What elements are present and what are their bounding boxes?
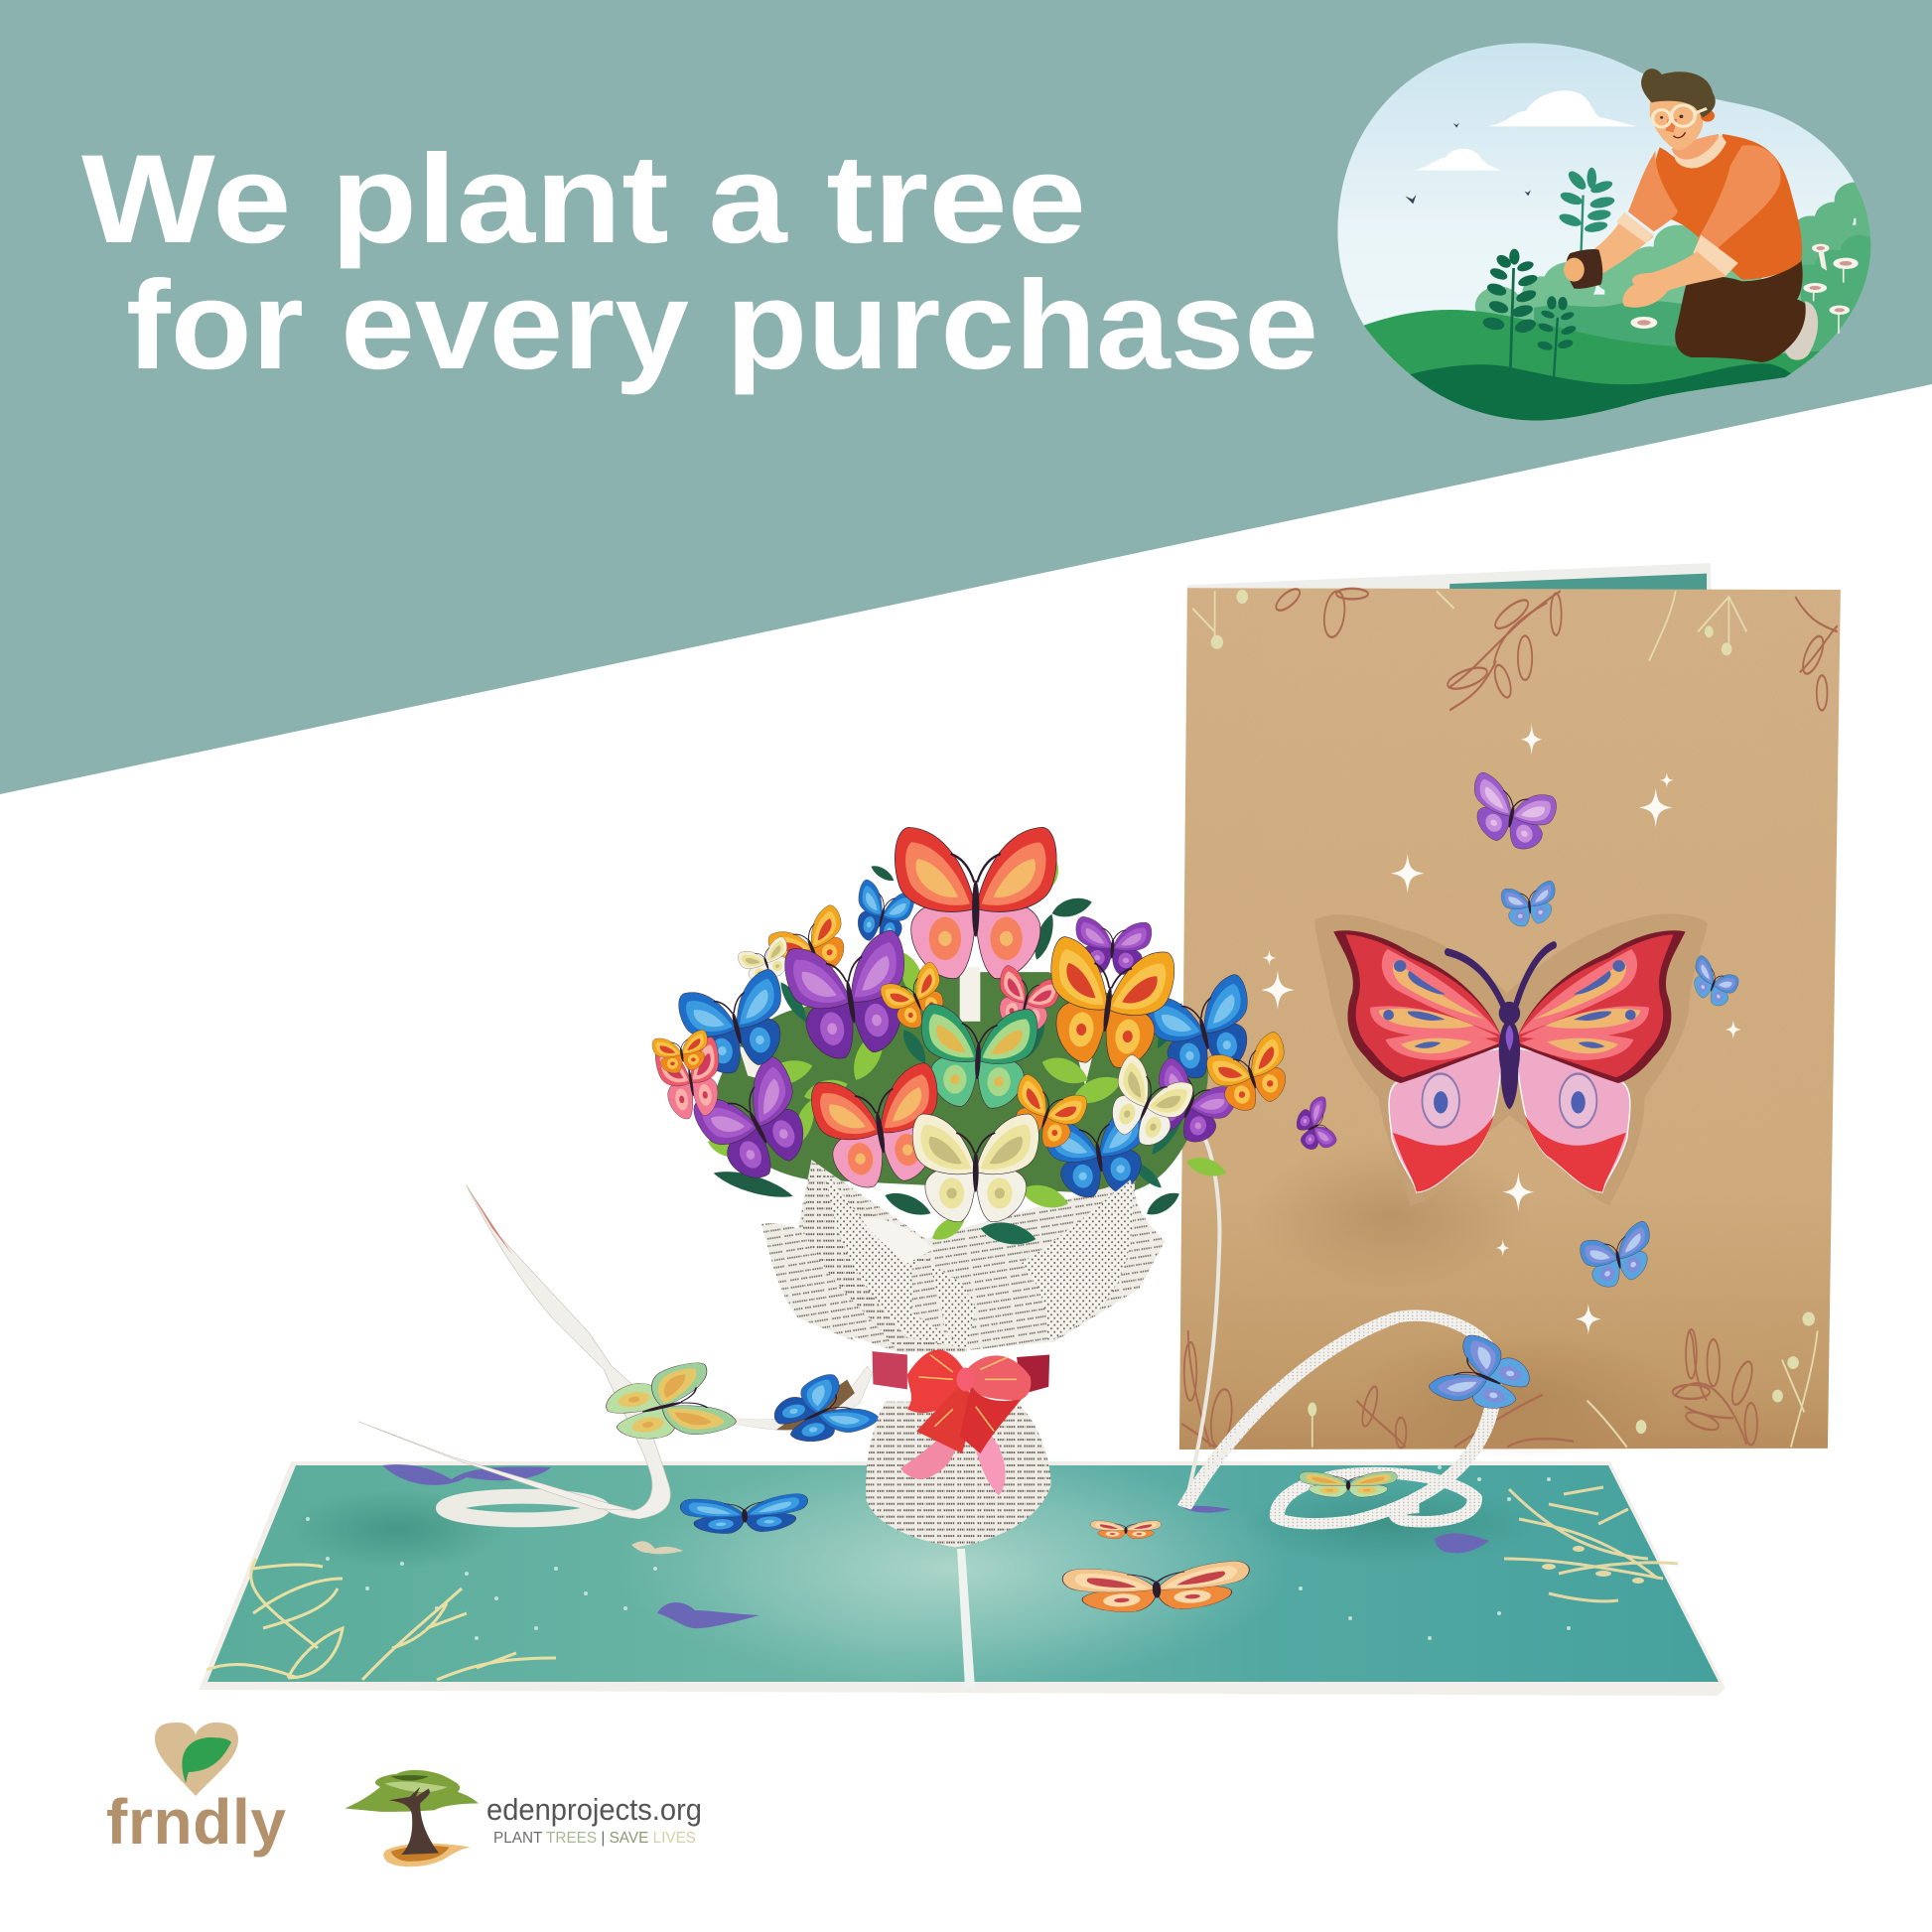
neck and collar: [1672, 134, 1719, 167]
bow: [900, 1350, 1031, 1495]
green hills: [1364, 310, 1821, 421]
cast shadows: [1250, 1139, 1534, 1290]
dark leaves: [776, 978, 1187, 1249]
headline: [81, 128, 1318, 395]
trousers: [1675, 258, 1811, 362]
green butterfly: [594, 1360, 739, 1452]
blue butterfly: [759, 1372, 882, 1453]
greeting card front cover: [1174, 579, 1849, 1458]
man: [1564, 69, 1818, 362]
arm and hand right: [1623, 251, 1726, 308]
foliage bottom: [1676, 1330, 1746, 1445]
tree: [345, 1770, 479, 1866]
paper edge: [199, 1461, 1725, 1696]
birds: [1405, 122, 1531, 204]
sky and landscape blob: [1338, 44, 1870, 421]
printed butterflies on base: [382, 1464, 1489, 1628]
back foliage: [712, 862, 1182, 1221]
arc and loop: [1184, 1315, 1494, 1524]
sprinkled dots: [306, 1465, 1571, 1640]
vase: [866, 1402, 1051, 1548]
wrap back paper: [761, 1160, 1165, 1352]
bouquet colour mass behind butterflies: [716, 972, 1208, 1194]
small butterflies on the cover: [1293, 770, 1740, 1295]
white stems: [739, 967, 1099, 1085]
logo: eden projects: [345, 1770, 702, 1866]
light leaves: [706, 858, 1228, 1246]
seedling: [1557, 168, 1616, 251]
wrap front folds: [802, 1163, 971, 1352]
foliage top: [1181, 585, 1838, 1449]
body and antennae: [1448, 945, 1554, 1005]
logo: frndly: [106, 1723, 286, 1858]
headline: for every purchase: [126, 254, 1318, 395]
bouquet pop-up: [651, 827, 1299, 1548]
dark young trees: [1481, 249, 1578, 379]
gold foliage right: [1504, 1487, 1678, 1601]
domain: edenprojects.org: [486, 1792, 702, 1827]
centre fold: [957, 1549, 975, 1688]
tagline: PLANT TREES | SAVE LIVES: [493, 1830, 696, 1847]
frndly wordmark: frndly: [106, 1786, 286, 1858]
ribbon band: [873, 1351, 907, 1389]
clouds: [1415, 90, 1636, 171]
thin ribbon from bouquet to base: [1185, 1135, 1219, 1505]
hair: [1641, 69, 1716, 117]
sleeve left: [1628, 151, 1678, 231]
shirt: [1654, 134, 1802, 280]
paper ribbon loop right: [1184, 1315, 1543, 1524]
glasses: [1653, 105, 1707, 127]
headline: We plant a tree: [81, 128, 1086, 269]
light glow below the bouquet: [616, 1449, 1291, 1688]
illustration: man planting a tree: [1338, 44, 1870, 421]
right wings: [1516, 930, 1686, 1192]
sleeve right: [1697, 145, 1781, 251]
paper streamer left: [358, 1185, 882, 1520]
kraft paper: [1179, 588, 1841, 1449]
gold foliage left: [207, 1559, 556, 1680]
arm left: [1592, 215, 1654, 275]
ribbon to the bow: [685, 1366, 873, 1431]
left wings: [1333, 930, 1503, 1192]
teal surface: [207, 1465, 1719, 1682]
leaf: [182, 1737, 231, 1783]
cast shadows: [288, 1489, 506, 1569]
head: [1650, 98, 1703, 151]
sparkles: [1261, 724, 1741, 1335]
butterflies: [651, 827, 1299, 1222]
long streamers: [467, 1185, 670, 1519]
spiral base: [447, 1496, 599, 1520]
big butterfly: [1333, 930, 1686, 1192]
heart: [155, 1723, 238, 1796]
flowers: [1630, 244, 1859, 334]
paper speckle: [1183, 588, 1839, 1259]
big butterfly cut-out shadow: [1314, 913, 1708, 1205]
soil plug: [1567, 249, 1602, 289]
shoe: [1785, 301, 1818, 360]
greeting card: inner back edge: [1187, 563, 1712, 591]
base card panel: [199, 1449, 1725, 1696]
flat green butterfly: [1300, 1471, 1397, 1497]
loop butterfly: [1426, 1332, 1543, 1422]
teal diagonal banner: [0, 0, 1932, 794]
background bushes: [1798, 183, 1870, 356]
